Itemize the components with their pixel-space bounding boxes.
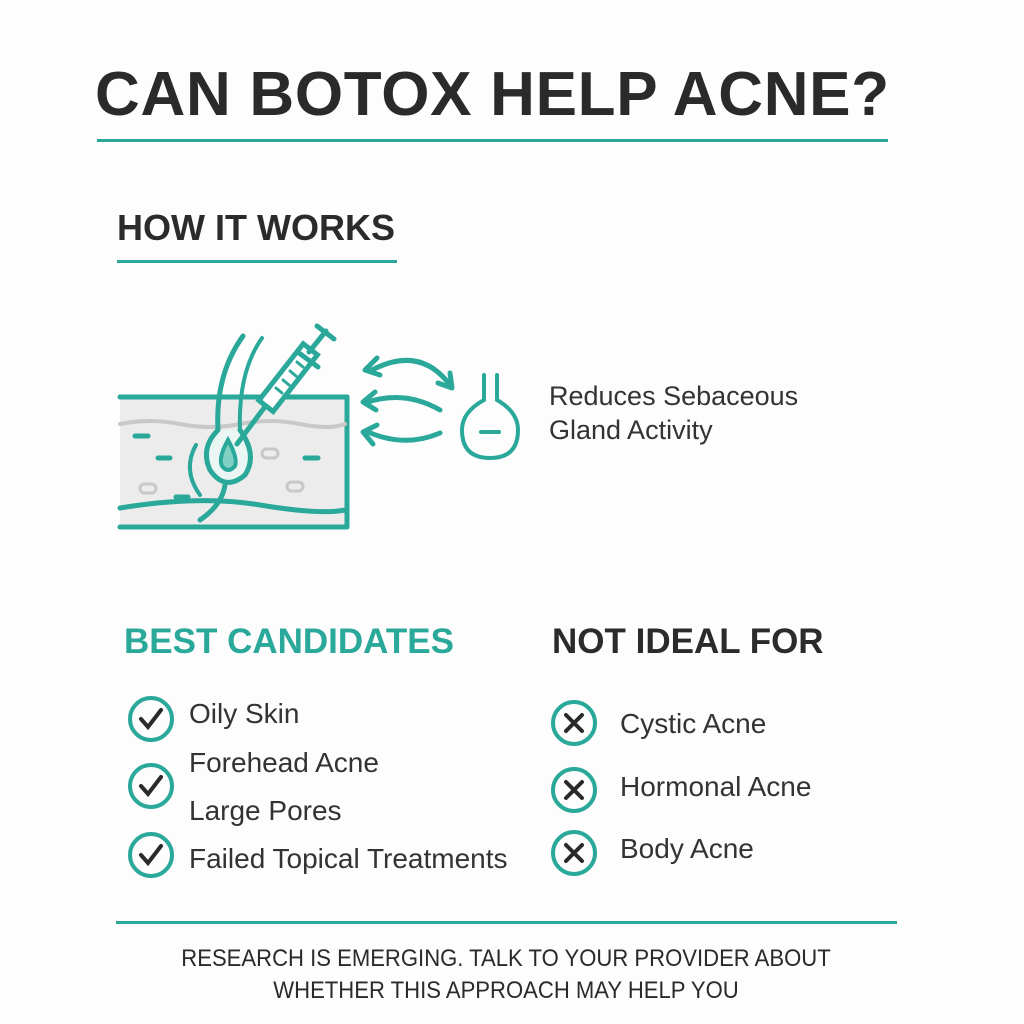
footer note: WHETHER THIS APPROACH MAY HELP YOU [273, 977, 739, 1004]
footer note: RESEARCH IS EMERGING. TALK TO YOUR PROVIDER ABOUT [181, 945, 831, 972]
footer note [181, 945, 831, 1004]
x icons [553, 702, 595, 874]
heading: best candidates: BEST CANDIDATES [124, 622, 454, 661]
text: gland activity: Gland Activity [549, 415, 713, 445]
hair follicle [190, 336, 262, 520]
list: not ideal [620, 708, 811, 864]
text: Cystic Acne [620, 708, 766, 739]
icon: sebaceous gland [462, 375, 518, 458]
heading: not ideal for: NOT IDEAL FOR [552, 622, 824, 661]
skin block [120, 397, 347, 527]
text: gland activity: Reduces Sebaceous [549, 381, 798, 411]
list: best candidates [189, 698, 508, 874]
arrows [363, 358, 452, 444]
text: gland activity [549, 381, 798, 445]
check icons [130, 698, 172, 876]
title: CAN BOTOX HELP ACNE? [95, 60, 890, 129]
text: Body Acne [620, 833, 754, 864]
text: Large Pores [189, 795, 342, 826]
text: Oily Skin [189, 698, 299, 729]
text: Forehead Acne [189, 747, 379, 778]
heading: how it works: HOW IT WORKS [117, 207, 395, 248]
syringe [237, 326, 334, 444]
text: Hormonal Acne [620, 771, 811, 802]
text: Failed Topical Treatments [189, 843, 508, 874]
